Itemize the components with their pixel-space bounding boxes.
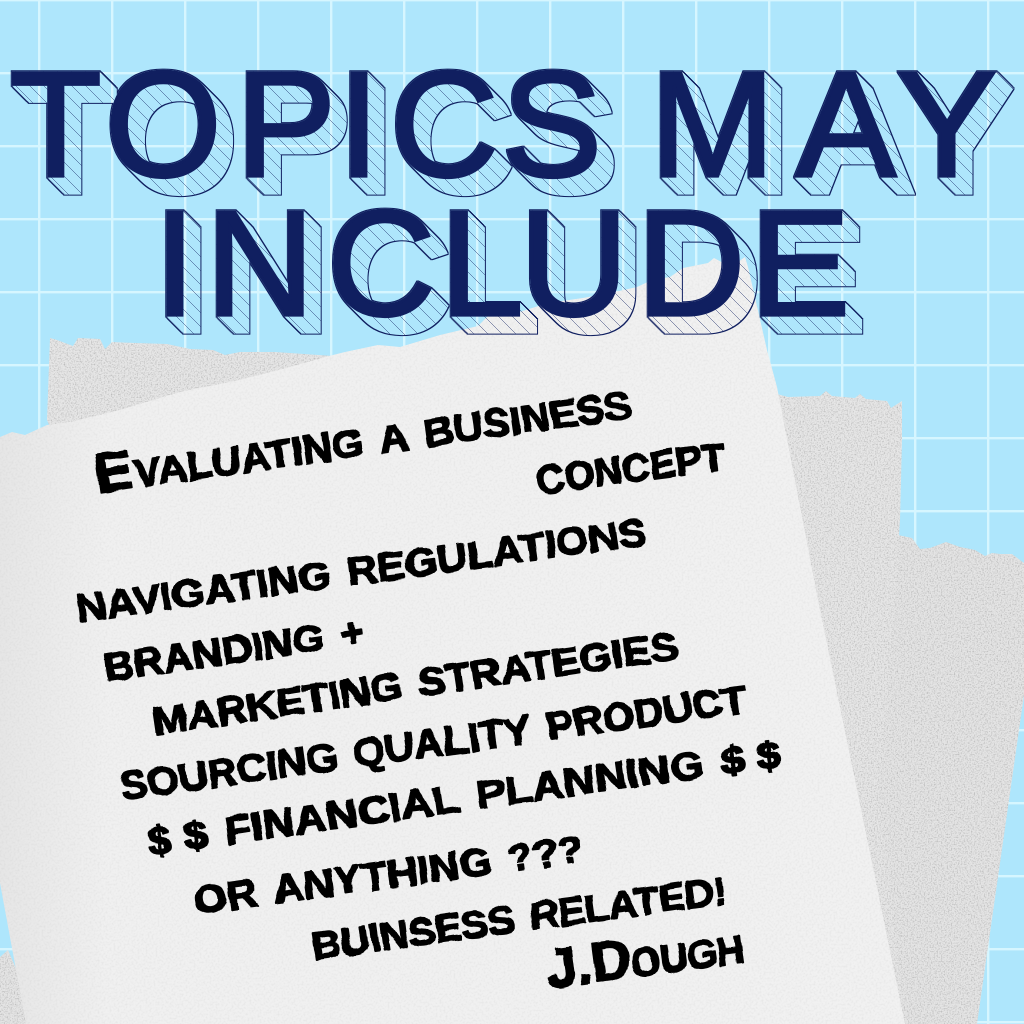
handwritten topic list: [71, 367, 783, 1000]
title line 1: TOPICS MAY: [10, 40, 997, 208]
paper: bottom left sheet corner: [0, 950, 40, 1024]
paper: middle torn sheet: [47, 338, 905, 1024]
paper: far right torn sheet: [860, 535, 1024, 1024]
paper: front sheet: [0, 257, 905, 1024]
text: sourcing quality product: sourcing quality product: [115, 662, 750, 812]
text: concept: concept: [532, 419, 728, 506]
text: signature J.Dough: J.Dough: [542, 912, 747, 1000]
title line 2: INCLUDE: [154, 179, 850, 347]
text: navigating regulations: navigating regulations: [71, 494, 649, 634]
text: marketing strategies: marketing strategies: [148, 608, 681, 747]
title: TOPICS MAY INCLUDE: [10, 40, 997, 347]
text: or anything: or anything ???: [189, 811, 586, 926]
text: financial planning: $ $ financial planning $ $: [143, 716, 783, 867]
text: branding +: branding +: [99, 594, 367, 693]
text: evaluating a business: Evaluating a business: [90, 367, 634, 505]
text: business related: buinsess related!: [307, 853, 730, 972]
